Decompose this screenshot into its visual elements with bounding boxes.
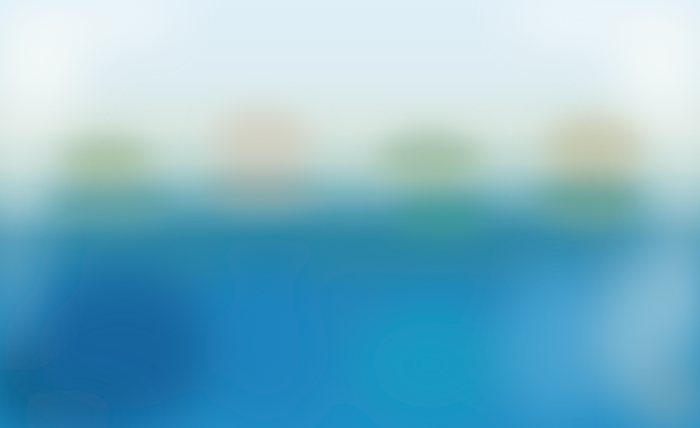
islands on the horizon bbox=[48, 110, 647, 237]
water colour patches bbox=[20, 225, 680, 428]
island 2 bbox=[212, 110, 312, 174]
dark vignette in lower corners bbox=[0, 230, 700, 428]
pale glow at top and sides bbox=[0, 0, 700, 240]
island 1 bbox=[57, 136, 153, 184]
island 4 bbox=[543, 116, 647, 180]
island 3 bbox=[378, 132, 482, 188]
